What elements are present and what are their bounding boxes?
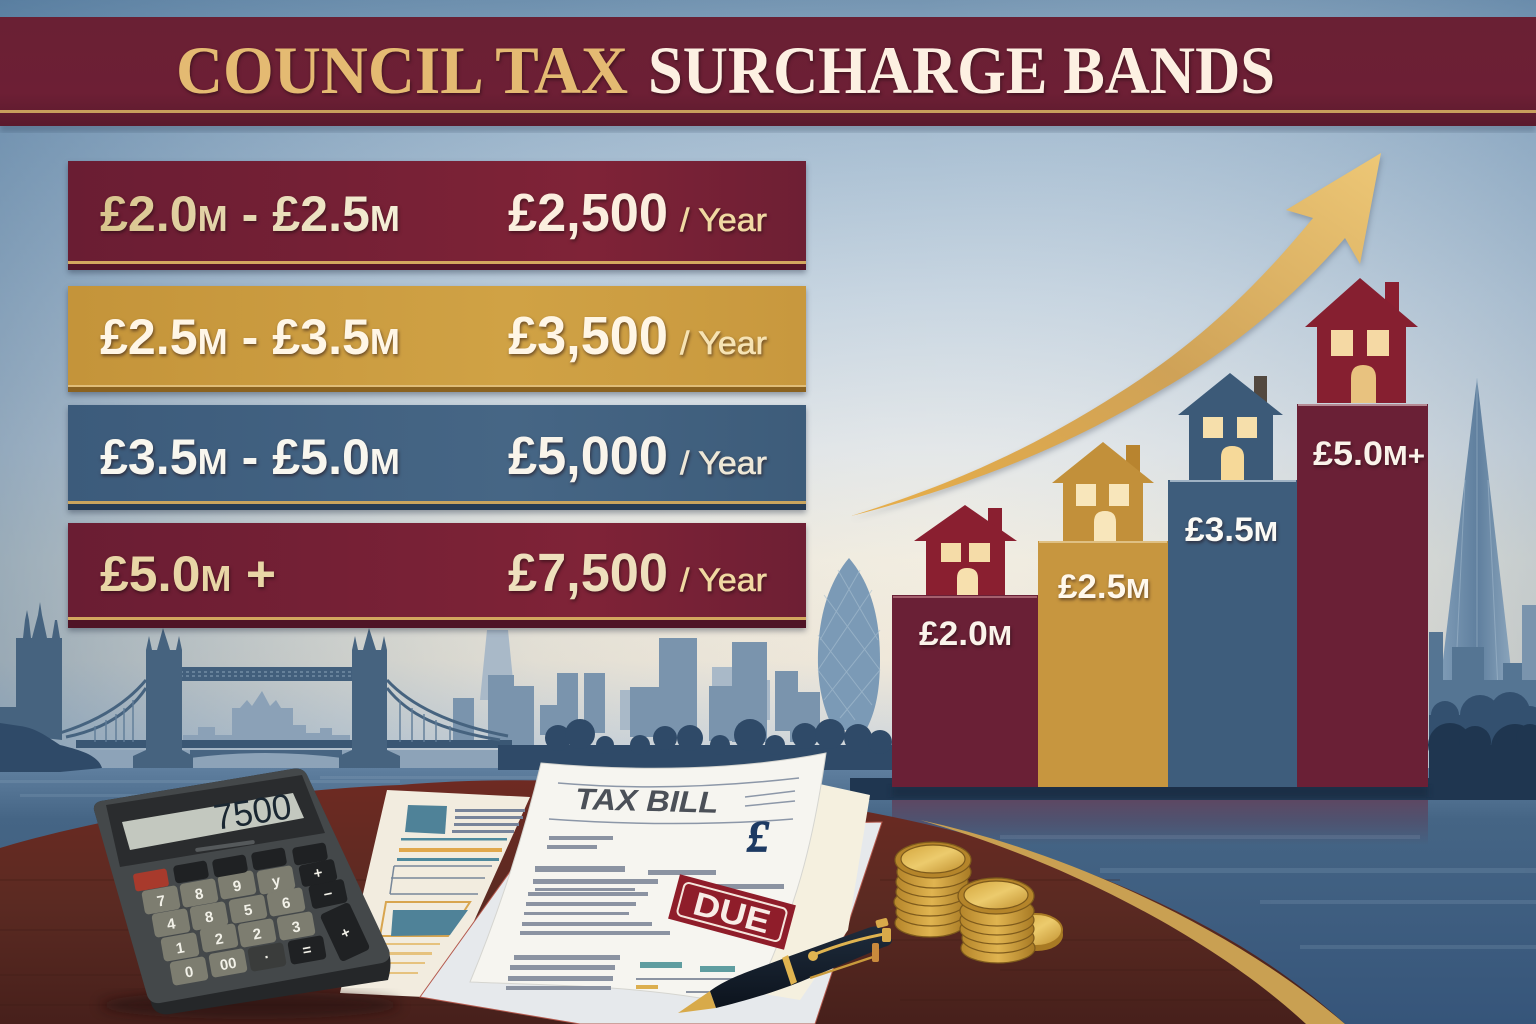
band row 4: / Year [680, 562, 767, 598]
title banner [0, 17, 1536, 132]
calculator keys: 2 [252, 925, 263, 944]
right edge buildings [1429, 605, 1536, 720]
west bridge tower [133, 628, 193, 768]
pound symbol: £ [746, 812, 770, 861]
bar 2.0M [892, 595, 1038, 787]
bar 5.0M+: £5.0M+ [1313, 435, 1425, 473]
bar 2.5M [1038, 541, 1168, 787]
band row 1: / Year [680, 202, 767, 238]
calculator keys: 1 [175, 939, 186, 958]
calculator keys: 3 [291, 918, 302, 937]
Tower Bridge [60, 628, 512, 768]
calculator keys: = [301, 941, 313, 960]
house icon 3 [1178, 373, 1283, 480]
band row 2 [68, 286, 806, 392]
calculator keys: + [338, 924, 353, 943]
bar reflections [892, 800, 1428, 845]
bar 2.5M: £2.5M [1058, 568, 1150, 606]
title text: SURCHARGE BANDS [648, 32, 1275, 108]
calculator keys: − [322, 885, 334, 904]
far buildings [480, 630, 770, 730]
calculator keys: y [271, 872, 282, 891]
calculator keys: 8 [204, 908, 215, 927]
calculator keys: 4 [166, 915, 177, 934]
band row 1 [68, 161, 806, 270]
table gold edge [920, 820, 1345, 1024]
background sky [0, 0, 1536, 800]
calculator keys [133, 842, 370, 986]
left tower [0, 602, 62, 745]
bar 3.5M [1168, 480, 1297, 787]
calculator keys: 9 [232, 877, 243, 896]
band row 4: £5.0M + [100, 546, 276, 602]
Gherkin [818, 558, 880, 730]
calculator keys: 0 [184, 963, 195, 982]
bar 3.5M: £3.5M [1185, 511, 1278, 549]
band row 3: £5,000 [508, 426, 668, 486]
single coin [1010, 914, 1063, 951]
house icon 4 [1305, 278, 1418, 403]
calculator keys: 7 [156, 892, 167, 911]
cream document [340, 790, 530, 997]
band row 2: £2.5M - £3.5M [100, 309, 400, 365]
London skyline [0, 378, 1536, 800]
calculator [94, 769, 400, 1019]
bridge road [76, 740, 512, 748]
calculator screen surround [106, 775, 325, 867]
calculator display [122, 793, 304, 850]
bridge walkway [179, 667, 353, 681]
band row 2: £3,500 [508, 306, 668, 366]
suspension cables [60, 680, 508, 740]
wooden table [0, 780, 1345, 1024]
gold coins [894, 842, 1063, 963]
tax bill heading: TAX BILL [575, 783, 719, 820]
cathedral silhouette [183, 691, 350, 745]
bar 2.0M: £2.0M [919, 615, 1012, 653]
right near trees and shoreline [850, 723, 1536, 800]
band row 1: £2.0M - £2.5M [100, 186, 400, 242]
DUE stamp [668, 874, 796, 950]
distant towers [453, 638, 820, 746]
band row 4: £7,500 [508, 543, 668, 603]
tree line [0, 719, 898, 772]
calculator keys: 2 [214, 930, 225, 949]
DUE stamp: DUE [689, 885, 774, 940]
calculator keys: 00 [219, 955, 238, 974]
title text [176, 32, 1275, 108]
pale blue document [420, 822, 882, 1024]
fountain pen [678, 918, 892, 1013]
band row 3 [68, 405, 806, 510]
stepped bar chart [892, 404, 1428, 797]
Shard [1443, 378, 1512, 690]
calculator keys: 6 [281, 894, 292, 913]
back coin stack [894, 842, 971, 937]
pale arches [90, 750, 510, 768]
calculator keys: + [312, 864, 324, 883]
rising arrow [851, 153, 1381, 516]
bill text lines [506, 836, 784, 993]
background documents [340, 783, 882, 1024]
cream back sheet [740, 783, 870, 1000]
band row 1: £2,500 [508, 183, 668, 243]
east bridge tower [339, 628, 400, 768]
calculator keys: 8 [194, 885, 205, 904]
tax bill document [470, 753, 826, 998]
calculator keys: · [263, 949, 271, 966]
band row 2: / Year [680, 325, 767, 361]
calculator keys: 5 [243, 901, 254, 920]
river water [0, 768, 1536, 1024]
house icon 2 [1052, 442, 1154, 541]
title text: COUNCIL TAX [176, 32, 628, 108]
house icon 1 [914, 505, 1017, 595]
band row 3: / Year [680, 445, 767, 481]
band row 4 [68, 523, 806, 628]
bar 5.0M+ [1297, 404, 1428, 787]
calculator: 7500 [211, 785, 294, 838]
band row 3: £3.5M - £5.0M [100, 429, 400, 485]
surcharge table [68, 161, 806, 628]
right mid trees [1429, 692, 1536, 745]
front coin stack [958, 878, 1035, 963]
